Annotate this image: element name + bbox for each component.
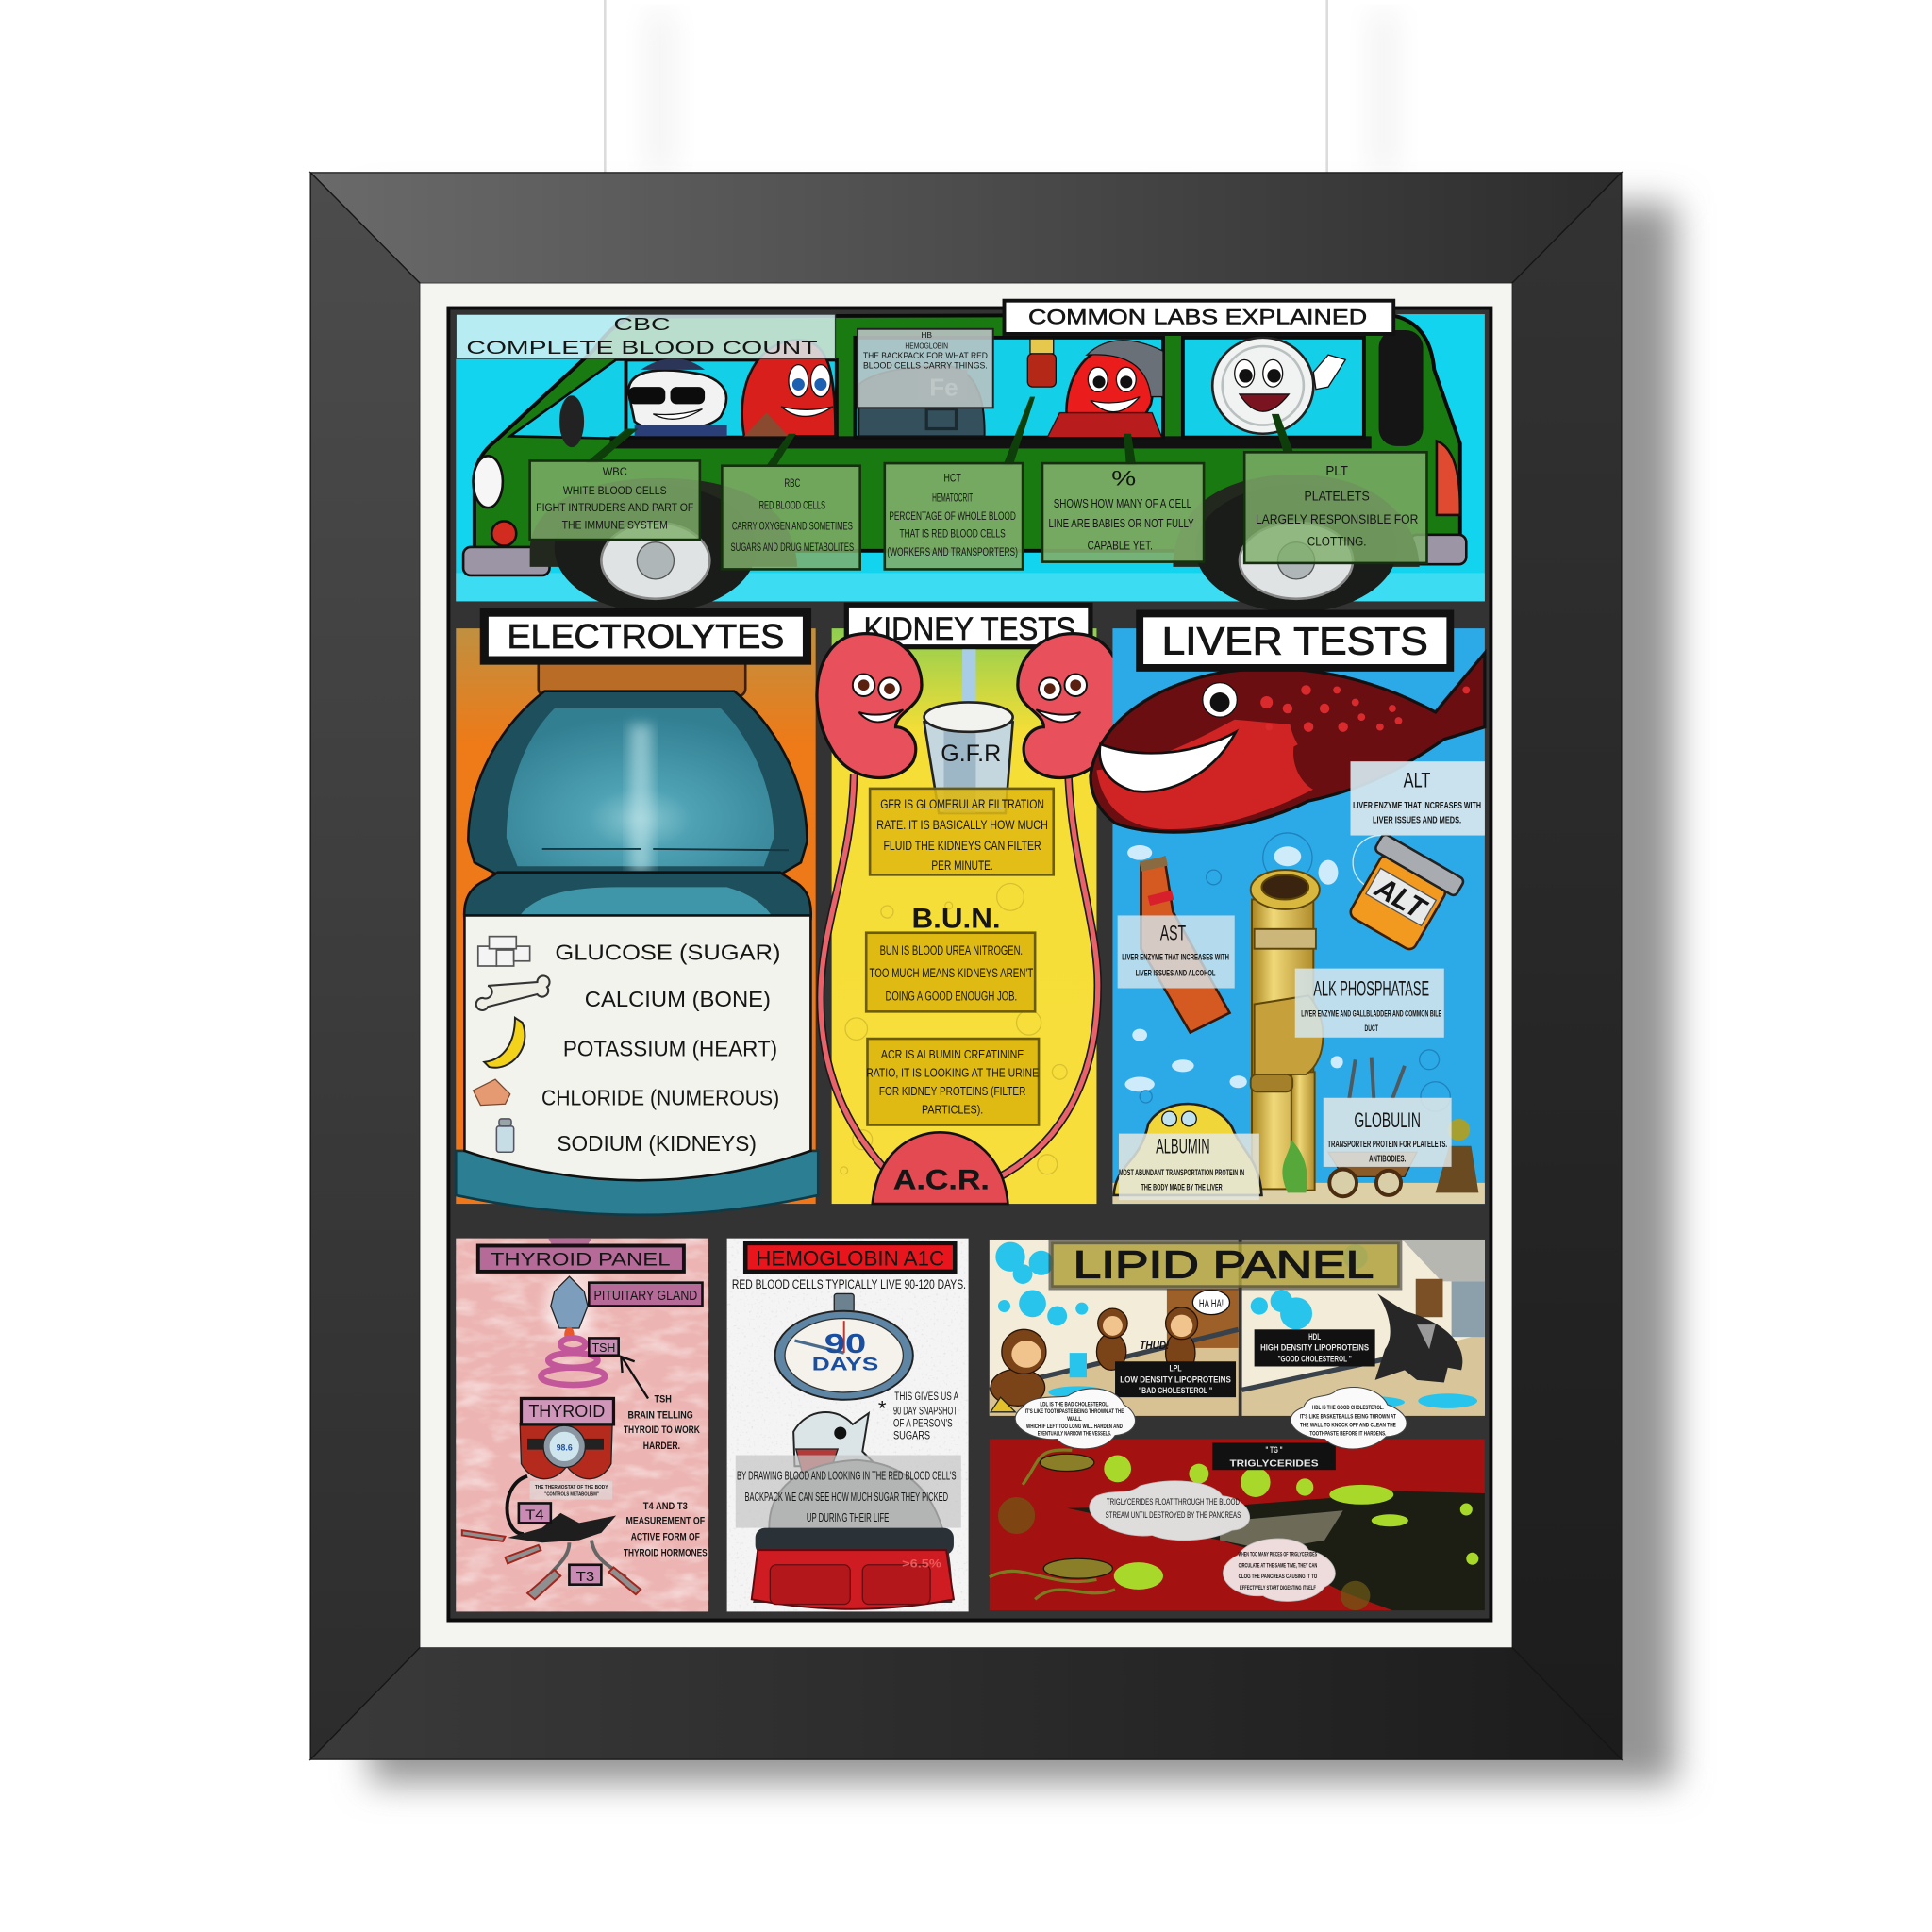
label: TG: " TG " [1265,1445,1283,1455]
label: T3: T3 [576,1570,594,1585]
icon: salt crystals [474,1079,510,1106]
caption: thermostat: THE THERMOSTAT OF THE BODY. [535,1485,609,1491]
label: RBC [722,466,860,569]
icon: ALT pill bottle [1340,833,1465,957]
icon: sugar shark [793,1412,877,1491]
label: T3 [569,1565,601,1585]
heading: kidney tests: KIDNEY TESTS [864,611,1075,647]
label: HCT [885,463,1023,569]
heading: thyroid panel [478,1245,684,1272]
side mirror [559,395,584,447]
text: TSH explanation: TSH [655,1393,672,1405]
label: HDL [1255,1329,1375,1366]
icon: bone [476,975,550,1010]
whale shark [1091,653,1485,832]
backpack with iron [858,366,985,436]
plaque debris [990,1450,1115,1599]
pointer stems [585,397,1293,466]
text box: AST [1118,915,1235,989]
text box: ALT: LIVER ISSUES AND MEDS. [1373,815,1461,825]
bus front bumper and rear bumper [463,535,1466,575]
panel: electrolytes [456,612,818,1215]
label: RBC: RBC [784,477,801,490]
title: common labs explained [1004,301,1393,334]
text box: how the test works: BY DRAWING BLOOD AND LOOKING IN THE RED BLOOD CELL'S [737,1469,957,1483]
label: PLT: PLT [1325,464,1348,479]
indicator and tail light [491,441,1460,546]
heading: lipid panel [1051,1242,1400,1288]
icon: bladder A.C.R.: A.C.R. [893,1164,990,1195]
text box: ALT [1351,761,1485,836]
thyroid thermostat: 98.6 [557,1442,573,1452]
text box: Albumin [1119,1134,1259,1200]
RBC with helmet [1027,339,1163,438]
text box: GFR [870,789,1054,874]
text box: how the test works: UP DURING THEIR LIFE [807,1510,890,1524]
label: TG [1212,1442,1336,1470]
text: T4 and T3: ACTIVE FORM OF [631,1532,700,1543]
text box: Globulin: TRANSPORTER PROTEIN FOR PLATELETS. [1327,1140,1447,1150]
icon: sugar cubes [478,937,530,966]
text box: ALK phosphatase: LIVER ENZYME AND GALLBLADDER AND COMMON BILE [1301,1009,1441,1019]
text box: ALK phosphatase: ALK PHOSPHATASE [1313,976,1429,1000]
label: percent: LINE ARE BABIES OR NOT FULLY [1049,516,1194,530]
icon: banana [484,1018,525,1068]
bubbles [1124,845,1343,1091]
label: TG: TRIGLYCERIDES [1230,1458,1319,1469]
thyroid thermostat [520,1424,612,1479]
cloud: LDL explanation [1015,1389,1135,1449]
heading: hemoglobin A1C: HEMOGLOBIN A1C [756,1246,944,1270]
heading: lipid panel: LIPID PANEL [1074,1242,1374,1286]
sports drink bottle [456,657,818,1215]
label: HCT: PERCENTAGE OF WHOLE BLOOD [889,509,1016,523]
label: WBC: THE IMMUNE SYSTEM [562,518,668,531]
label: HCT: (WORKERS AND TRANSPORTERS) [887,545,1018,558]
heading: liver tests: LIVER TESTS [1162,620,1428,663]
heading: liver tests [1140,613,1450,668]
text box: GFR: PER MINUTE. [931,858,993,873]
heading: CBC: COMPLETE BLOOD COUNT [466,338,818,358]
title: common labs explained: COMMON LABS EXPLAINED [1028,306,1367,329]
window: backpack and RBC [855,338,1163,438]
rear vent [1379,330,1424,446]
seaweed [1282,1140,1307,1192]
label: PLT: LARGELY RESPONSIBLE FOR [1256,512,1418,526]
panel: kidney tests [817,605,1123,1204]
wheel arches [530,475,1420,567]
icon: stopwatch [775,1293,913,1400]
label: T4: T4 [525,1507,544,1523]
label: percent: SHOWS HOW MANY OF A CELL [1054,496,1191,510]
label: RBC: CARRY OXYGEN AND SOMETIMES [732,520,853,533]
note: snapshot: OF A PERSON'S [893,1417,953,1429]
icon: albumin car [1114,1104,1261,1195]
text box: Albumin: MOST ABUNDANT TRANSPORTATION PROTEIN IN [1119,1168,1244,1177]
text box: BUN: DOING A GOOD ENOUGH JOB. [885,990,1017,1004]
cloud: HDL explanation: THE WALL TO KNOCK OFF AND CLEAN THE [1300,1423,1396,1428]
note: snapshot: THIS GIVES US A [894,1391,958,1403]
cloud: HDL explanation: IT'S LIKE BASKETBALLS BEING THROWN AT [1300,1414,1396,1420]
green plasma shots [1104,1456,1478,1590]
icon: salt shaker [496,1119,514,1152]
label: RBC: RED BLOOD CELLS [759,498,825,511]
comic: LDL monkeys: HA HA! [1199,1298,1224,1310]
text: TSH explanation: BRAIN TELLING [627,1409,693,1421]
black picture frame [310,173,1622,1759]
text box: AST: AST [1160,922,1186,945]
label: HCT: HEMATOCRIT [932,491,973,505]
text box: ALT: LIVER ENZYME THAT INCREASES WITH [1353,801,1481,811]
heading: thyroid panel: THYROID PANEL [491,1249,671,1270]
panel: liver tests [1091,613,1485,1204]
text box: ACR: PARTICLES). [922,1103,983,1117]
label: Hb hemoglobin: HEMOGLOBIN [905,341,948,351]
text box: ACR: FOR KIDNEY PROTEINS (FILTER [879,1084,1025,1098]
icon: backpack: >6.5% [902,1557,942,1570]
note: snapshot: 90 DAY SNAPSHOT [893,1405,958,1417]
note: snapshot [878,1391,958,1442]
label: Hb hemoglobin: HB [921,330,932,340]
label: percent [1042,463,1204,562]
cloud: pancreatitis warning: EFFECTIVELY START DIGESTING ITSELF [1240,1585,1316,1591]
icon: stopwatch: DAYS [812,1354,878,1374]
ingredient label: CHLORIDE (NUMEROUS) [541,1086,779,1110]
ingredient label: GLUCOSE (SUGAR) [555,940,780,964]
comic: LDL monkeys [990,1240,1239,1416]
cloud: HDL explanation [1291,1388,1407,1449]
comic: triglyceride battle [990,1440,1485,1610]
label: HCT: THAT IS RED BLOOD CELLS [899,526,1006,540]
text box: BUN: BUN IS BLOOD UREA NITROGEN. [880,943,1023,958]
panel: hemoglobin A1C [727,1239,969,1611]
bubble outlines [1140,833,1450,1111]
tubes: inner colour [821,774,1098,1179]
text box: Globulin: ANTIBODIES. [1369,1155,1406,1165]
label: RBC: SUGARS AND DRUG METABOLITES [731,541,854,554]
frame shadow [370,204,1675,1783]
text box: ACR: RATIO, IT IS LOOKING AT THE URINE [866,1066,1039,1080]
ingredient label: CALCIUM (BONE) [585,987,771,1011]
cloud: LDL explanation: WALL [1067,1417,1082,1423]
cloud: triglyceride float: TRIGLYCERIDES FLOAT THROUGH THE BLOOD [1107,1497,1240,1507]
text: T4 and T3 [624,1501,708,1559]
text: T4 and T3: T4 AND T3 [643,1501,688,1512]
comic sheet [448,301,1491,1621]
text box: ALK phosphatase: DUCT [1365,1024,1378,1033]
backpack with iron: Fe [929,373,958,401]
label: Hb hemoglobin: BLOOD CELLS CARRY THINGS. [863,361,988,371]
text: T4 and T3: MEASUREMENT OF [626,1516,705,1527]
pituitary spaceship [544,1239,594,1341]
label: T4 [519,1503,551,1523]
panel: lipid [990,1240,1485,1610]
text: TSH explanation [624,1393,700,1452]
text box: GFR: RATE. IT IS BASICALLY HOW MUCH [876,818,1048,832]
label: pituitary gland: PITUITARY GLAND [594,1288,697,1304]
label: HCT: HCT [943,473,961,485]
label: HDL: "GOOD CHOLESTEROL " [1277,1354,1352,1363]
window band [610,436,1372,448]
heading: CBC: CBC [613,314,671,334]
text: T4 and T3: THYROID HORMONES [624,1548,708,1559]
icon: brass pipe [1251,870,1323,1191]
icon: backpack [752,1460,954,1609]
text box: ALK phosphatase [1295,969,1444,1038]
icon: stopwatch: 90 [824,1329,866,1359]
signal rings [541,1338,605,1385]
label: LDL: LOW DENSITY LIPOPROTEINS [1120,1374,1231,1384]
label: percent: % [1111,467,1136,491]
icon: G.F.R. cup with stream: G.F.R [941,741,1001,767]
label: PLT: CLOTTING. [1307,535,1366,549]
label: WBC: WHITE BLOOD CELLS [563,484,667,497]
icon: G.F.R. cup with stream [924,649,1013,813]
text: TSH explanation: HARDER. [643,1441,680,1452]
icon: bladder A.C.R. [873,1132,1008,1204]
text box: ALT: ALT [1404,769,1431,792]
note: snapshot: * [878,1397,887,1421]
label: TSH: TSH [592,1341,615,1355]
note: snapshot: SUGARS [893,1430,930,1442]
caption: thermostat: "CONTROLS METABOLISM" [544,1492,599,1498]
alien debris dots [998,1497,1370,1610]
icon: right kidney [1018,634,1123,778]
label: HDL: HDL [1308,1332,1321,1341]
text box: ACR [866,1039,1039,1124]
cloud: triglyceride float: STREAM UNTIL DESTROYED BY THE PANCREAS [1106,1510,1241,1520]
label: WBC: WBC [603,466,627,478]
cloud: LDL explanation: IT'S LIKE TOOTHPASTE BEING THROWN AT THE [1025,1409,1124,1415]
icon: left kidney [817,634,922,778]
text box: BUN [866,933,1035,1011]
bus body [475,314,1460,551]
icon: ALT pill bottle: ALT [1369,871,1433,926]
wheels with tyres [555,484,1397,612]
arrow: to TSH [621,1357,648,1398]
text box: Albumin: THE BODY MADE BY THE LIVER [1141,1183,1223,1192]
text box: BUN: TOO MUCH MEANS KIDNEYS AREN'T [869,966,1034,980]
label: thyroid [521,1398,613,1424]
text box: GFR: GFR IS GLOMERULAR FILTRATION [880,797,1044,811]
text: lifespan: RED BLOOD CELLS TYPICALLY LIVE 90-120 DAYS. [732,1277,966,1291]
alien fleet [1040,1454,1112,1578]
text box: Globulin [1324,1098,1452,1167]
window: platelet [1183,338,1364,438]
headlight [474,456,503,508]
label: PLT [1244,452,1426,563]
cloud: LDL explanation: EVENTUALLY NARROW THE VESSELS. [1038,1432,1111,1438]
text box: AST: LIVER ENZYME THAT INCREASES WITH [1122,952,1229,961]
comic: LDL monkeys: THUD! [1140,1340,1170,1352]
cloud: pancreatitis warning: CIRCULATE AT THE SAME TIME, THEY CAN [1239,1562,1318,1569]
heading: electrolytes [484,612,808,660]
stealth jet and missiles [462,1476,641,1599]
label: percent: CAPABLE YET. [1088,539,1153,553]
white poster mat [420,283,1512,1647]
ingredient label: POTASSIUM (HEART) [563,1036,777,1060]
cloud: pancreatitis warning [1223,1539,1335,1601]
caption: thermostat [530,1481,612,1500]
window: driver [626,340,837,438]
label: LDL [1115,1361,1236,1397]
cloud: HDL explanation: TOOTHPASTE BEFORE IT HARDENS. [1309,1432,1387,1438]
RBC character [742,340,836,436]
text box: GFR: FLUID THE KIDNEYS CAN FILTER [883,839,1041,853]
label: pituitary gland [589,1283,702,1306]
label: thyroid: THYROID [528,1401,605,1421]
label: Hb hemoglobin: THE BACKPACK FOR WHAT RED [863,351,988,360]
icon: AST bottle [1140,856,1230,1033]
cloud: LDL explanation: WHICH IF LEFT TOO LONG WILL HARDEN AND [1026,1424,1123,1430]
panel: CBC bus [456,301,1485,612]
heading: CBC [456,314,836,358]
banana peel [991,1397,1015,1412]
sand floor [1112,1183,1485,1204]
label: Hb hemoglobin [858,329,993,408]
windshield [510,359,626,439]
icon: sunk wagon and goblin [1328,1058,1478,1196]
heading: electrolytes: ELECTROLYTES [507,617,784,656]
tubes: ureters [821,774,1098,1179]
label: WBC [530,460,700,540]
text box: ACR: ACR IS ALBUMIN CREATININE [881,1047,1024,1061]
label: LDL: "BAD CHOLESTEROL " [1139,1386,1212,1395]
dark warship [1067,1491,1485,1610]
label: TSH [589,1338,619,1356]
label: HDL: HIGH DENSITY LIPOPROTEINS [1260,1343,1369,1353]
cloud: pancreatitis warning: CLOG THE PANCREAS CAUSING IT TO [1239,1574,1317,1580]
bubbles [841,883,1067,1174]
cloud: LDL explanation: LDL IS THE BAD CHOLESTEROL. [1040,1402,1109,1407]
text box: Globulin: GLOBULIN [1354,1108,1421,1132]
ingredient label: SODIUM (KIDNEYS) [557,1131,757,1156]
panel: thyroid [456,1239,708,1611]
WBC character [628,358,727,436]
ingredient label [464,915,810,1180]
text: TSH explanation: THYROID TO WORK [624,1424,700,1436]
heading: B.U.N.: B.U.N. [912,904,1001,935]
comic: HDL gorilla [1242,1240,1485,1416]
label: WBC: FIGHT INTRUDERS AND PART OF [536,501,694,514]
label: PLT: PLATELETS [1305,489,1370,503]
text box: how the test works [736,1456,961,1528]
text box: Albumin: ALBUMIN [1156,1135,1210,1158]
cloud: pancreatitis warning: WHEN TOO MANY PIECES OF TRIGLYCERIDES [1239,1552,1317,1558]
text box: how the test works: BACKPACK WE CAN SEE HOW MUCH SUGAR THEY PICKED [745,1490,948,1504]
label: LDL: LPL [1170,1364,1182,1374]
cloud: triglyceride float [1090,1481,1250,1541]
cloud: HDL explanation: HDL IS THE GOOD CHOLESTEROL. [1312,1406,1384,1411]
text box: AST: LIVER ISSUES AND ALCOHOL [1136,968,1216,977]
